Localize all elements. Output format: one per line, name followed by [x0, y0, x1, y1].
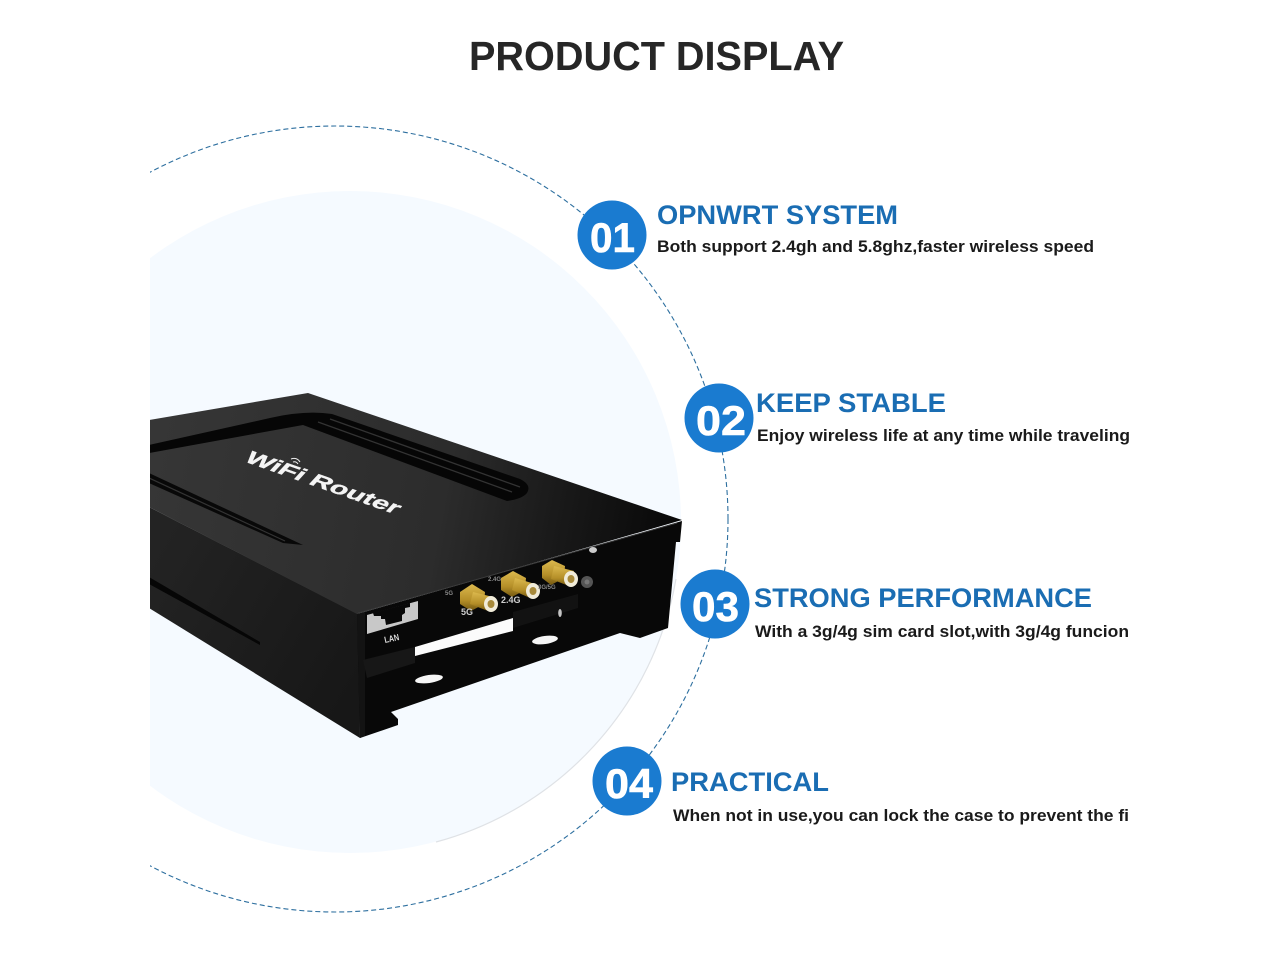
- description 03: With a 3g/4g sim card slot,with 3g/4g funcion: [755, 622, 1129, 641]
- badge 03: 03: [692, 583, 739, 630]
- antenna connector 2.4G: [488, 571, 540, 605]
- description 04: When not in use,you can lock the case to prevent the fi: [673, 806, 1129, 825]
- infographic canvas: [150, 42, 1129, 912]
- antenna connector 2.4G: 2.4G: [501, 595, 521, 605]
- LAN socket: [373, 603, 410, 625]
- status knob: [581, 576, 593, 588]
- end face corner strip: [357, 612, 365, 738]
- LAN port: [367, 601, 418, 645]
- top recess lower groove: [149, 473, 303, 545]
- recess groove highlights: [318, 419, 520, 492]
- antenna connector 2.4G: 2.4G: [488, 577, 501, 583]
- heading 03: STRONG PERFORMANCE: [754, 583, 1092, 613]
- description 02: Enjoy wireless life at any time while traveling: [757, 426, 1130, 445]
- upper connector tip: [589, 547, 597, 553]
- SIM slot: [415, 618, 513, 656]
- heading 02: KEEP STABLE: [756, 388, 946, 418]
- LAN label: LAN: [383, 632, 400, 645]
- wifi logo arcs: [291, 458, 300, 464]
- top recess band: [149, 413, 528, 501]
- antenna connector 3G: 3G/5G: [538, 585, 556, 591]
- title: PRODUCT DISPLAY: [469, 33, 844, 79]
- router end face: [357, 521, 682, 738]
- pale blue circle: [150, 191, 681, 853]
- end face rail right: [513, 594, 578, 628]
- circle shadow arc: [436, 579, 676, 842]
- antenna connector 5G: [445, 584, 498, 617]
- feature 01: [578, 200, 1094, 270]
- description 01: Both support 2.4gh and 5.8ghz,faster wireless speed: [657, 237, 1094, 256]
- end face rail left: [363, 647, 415, 678]
- heading 01: OPNWRT SYSTEM: [657, 200, 898, 230]
- antenna connector 3G: [538, 560, 578, 591]
- feature 02: [684, 384, 1130, 452]
- feature 03: [680, 570, 1129, 641]
- router top face: [149, 393, 682, 614]
- mounting holes: [415, 609, 562, 685]
- top front edge highlight: [358, 523, 677, 613]
- lower groove highlight: [149, 478, 285, 541]
- router side face: [149, 507, 360, 738]
- wifi router logo text: WiFi Router: [240, 449, 407, 518]
- router: [149, 393, 682, 738]
- antenna connector 5G: 5G: [445, 591, 453, 597]
- badge 04: 04: [605, 760, 654, 807]
- badge 02: [684, 384, 754, 452]
- heading 04: PRACTICAL: [671, 767, 829, 797]
- badge 04: [592, 746, 662, 816]
- badge 02: 02: [696, 397, 746, 444]
- dashed orbit: [150, 126, 729, 912]
- background circles: [150, 126, 729, 912]
- feature 04: [592, 746, 1129, 825]
- badge 01: 01: [590, 214, 635, 261]
- badge 01: [578, 200, 646, 270]
- antenna connector 5G: 5G: [461, 607, 473, 617]
- router side groove: [149, 577, 260, 645]
- badge 03: [680, 570, 750, 638]
